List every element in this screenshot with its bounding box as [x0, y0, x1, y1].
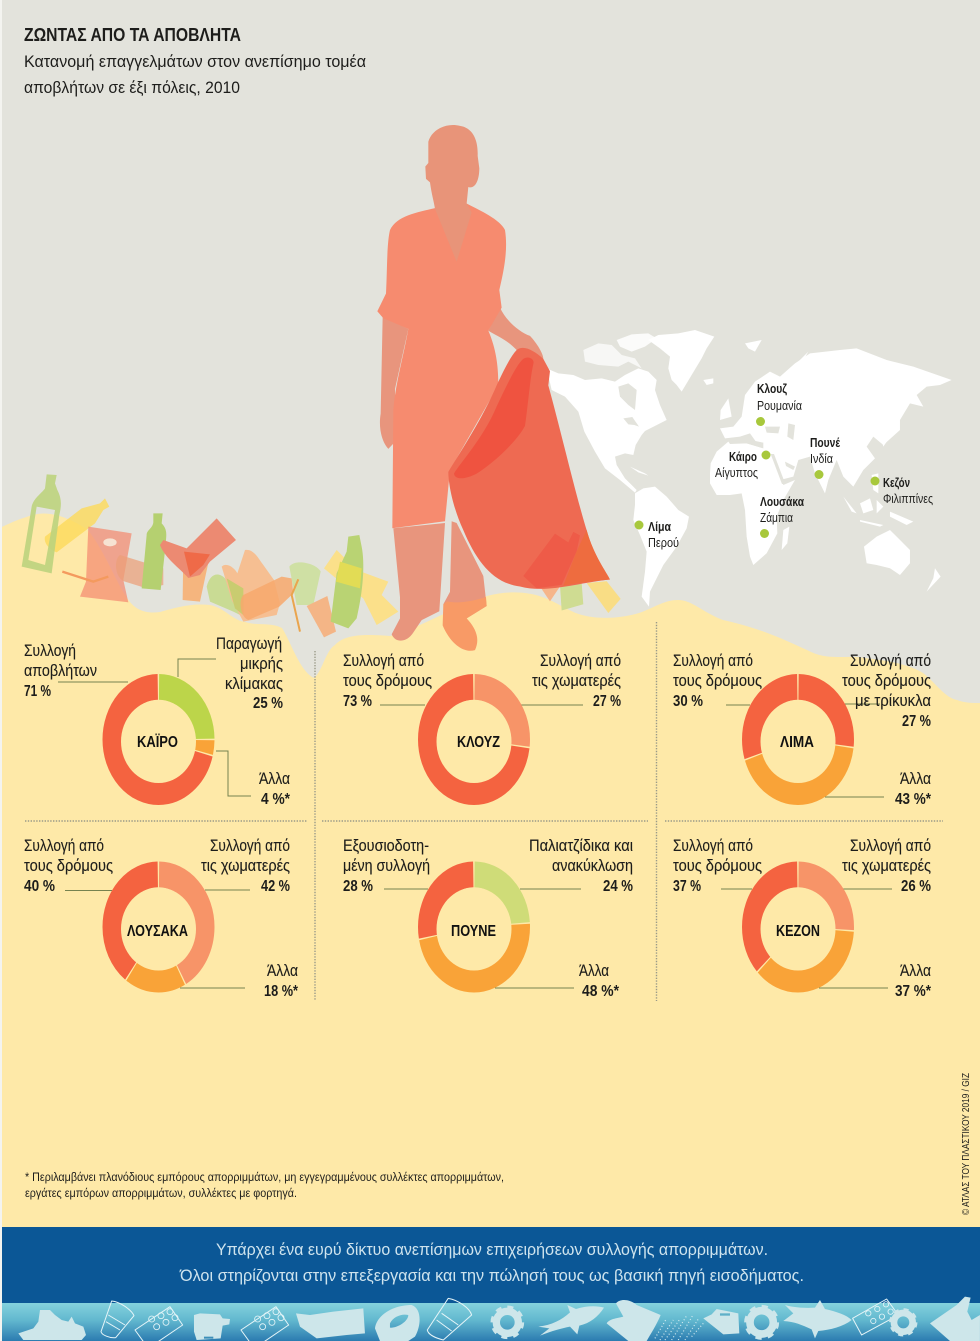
donut panel: Pune: μένη συλλογή [343, 857, 430, 875]
marker: Pune [810, 435, 840, 479]
sea strip waste icons: left [18, 1298, 472, 1341]
donut panel: Lima [673, 652, 932, 808]
donut panel: Pune: 24 % [603, 878, 633, 895]
donut panel: Lima: τους δρόμους [842, 672, 931, 690]
sea strip waste icons: right [493, 1297, 980, 1341]
right arm [488, 308, 543, 359]
footnote [25, 1170, 504, 1200]
icon: gear [493, 1308, 522, 1337]
donut panel: Quezon: ΚΕΖΟΝ [776, 923, 820, 940]
icon: gear 2 [746, 1307, 777, 1338]
icon: glove [324, 550, 398, 625]
marker: Kluj: Κλουζ [757, 381, 787, 396]
icon: green bottle 2 [142, 513, 166, 590]
left leg [392, 523, 445, 641]
icon: gear 3 [891, 1310, 916, 1335]
icon: fish 2 [783, 1300, 852, 1338]
donut panel: Quezon: τους δρόμους [673, 857, 762, 875]
icon: cup 2 [427, 1298, 472, 1340]
marker: Lima: Λίμα [648, 519, 671, 534]
icon: carrier bag [222, 550, 280, 622]
icon: plastic bag 2 [930, 1297, 980, 1341]
donut panel: Kluj: τους δρόμους [343, 672, 432, 690]
shirt [377, 204, 506, 528]
icon: cup [101, 1301, 134, 1338]
donut panel: Lusaka: 18 %* [264, 983, 299, 1000]
title block [24, 24, 366, 97]
icon: detergent bottle [703, 1309, 739, 1334]
banner: Υπάρχει ένα ευρύ δίκτυο ανεπίσημων επιχειρήσεων συλλογής απορριμμάτων. [216, 1240, 768, 1259]
sack [448, 348, 610, 589]
icon: bottle and glove overlap [336, 562, 362, 588]
donut panel: Lusaka [24, 837, 299, 1000]
donut panel: Quezon: Άλλα [900, 962, 931, 980]
icon: bottle [194, 1313, 230, 1340]
sack corner [563, 530, 610, 586]
donut panel: Quezon: τις χωματερές [842, 857, 931, 875]
donut panel: Kluj: Συλλογή από [540, 652, 621, 670]
donut panel: Quezon: 37 % [673, 878, 701, 895]
icon: microplastic spray [655, 1314, 703, 1340]
donut panel: Cairo: κλίμακας [225, 675, 283, 693]
icon: fish [538, 1305, 604, 1336]
map city markers and labels [634, 381, 933, 550]
icon: green bottle [22, 474, 61, 573]
sea strip [2, 1303, 980, 1341]
icon: green can [207, 575, 243, 617]
donut panel: Lima: 30 % [673, 693, 703, 710]
marker: Lusaka: Ζάμπια [760, 510, 793, 525]
donut panel: Lusaka: 42 % [261, 878, 290, 895]
icon: crumpled bottle [296, 1308, 365, 1338]
donut panel: Pune: Παλιατζίδικα και [529, 837, 633, 855]
donut panel: Lima: Άλλα [900, 770, 931, 788]
map: Americas and Greenland [547, 330, 714, 607]
donut panel: Lusaka: Άλλα [267, 962, 298, 980]
grid dividers [25, 622, 943, 1001]
donut panel: Lima: 27 % [902, 713, 931, 730]
marker: Lusaka [760, 494, 804, 538]
donut panel: Lima: τους δρόμους [673, 672, 762, 690]
sack inner fold [454, 357, 534, 478]
marker: Lima [634, 519, 679, 550]
donut panel: Kluj [343, 652, 621, 792]
donut panel: Kluj: 27 % [593, 693, 621, 710]
donut panel: Lusaka: Συλλογή από [210, 837, 290, 855]
donut panel: Pune: Εξουσιοδοτη- [343, 837, 429, 855]
plastic waste pile: right [207, 535, 398, 637]
marker: Cairo [715, 449, 770, 480]
donut chart: Quezon [753, 874, 843, 980]
icon: cup overlap [184, 552, 210, 577]
items behind sack [540, 581, 621, 613]
donut panel: Lusaka: Συλλογή από [24, 837, 104, 855]
icon: stirrer [292, 579, 300, 632]
icon: green cup [289, 562, 321, 605]
donut panel: Cairo [24, 635, 291, 808]
donut chart: Kluj [429, 687, 519, 792]
icon: plastic bag [80, 527, 132, 602]
donut panel: Kluj: ΚΛΟΥΖ [457, 734, 500, 751]
icon: plastic bag [607, 1300, 661, 1341]
donut panel: Cairo: Συλλογή [24, 642, 76, 660]
icon: can [116, 555, 163, 588]
title block: αποβλήτων σε έξι πόλεις, 2010 [24, 78, 240, 97]
icon: ship [18, 1310, 86, 1340]
marker: Lusaka: Λουσάκα [760, 494, 804, 509]
donut chart: Lusaka [114, 874, 204, 980]
donut panel: Cairo: 25 % [253, 695, 283, 712]
marker: Quezon [870, 475, 933, 506]
donut panel: Lima: 43 %* [895, 791, 932, 808]
marker: Kluj: Ρουμανία [757, 398, 802, 413]
icon: brick [135, 1307, 183, 1341]
marker: Quezon: Κεζόν [883, 475, 910, 490]
title block: Κατανομή επαγγελμάτων στον ανεπίσημο τομέα [24, 52, 366, 71]
donut panel: Lima: Συλλογή από [673, 652, 753, 670]
map: Europe, Asia, Africa, Australia [710, 340, 952, 592]
donut panel: Pune: 48 %* [582, 983, 620, 1000]
donut panel: Lusaka: ΛΟΥΣΑΚΑ [127, 923, 188, 940]
marker: Quezon: Φιλιππίνες [883, 491, 933, 506]
donut panel: Kluj: 73 % [343, 693, 372, 710]
icon: green overlap [227, 578, 243, 615]
marker: Cairo: Κάιρο [729, 449, 757, 464]
donut panel: Quezon [673, 837, 932, 1000]
donut panel: Lusaka: τις χωματερές [201, 857, 290, 875]
donut panel: Quezon: 26 % [901, 878, 931, 895]
donut panel: Pune: ανακύκλωση [552, 857, 633, 875]
icon: brick 3 [853, 1299, 898, 1335]
icon: plate stack [375, 1305, 420, 1341]
sand wave background [2, 513, 980, 1227]
bottle inside sack [523, 532, 580, 588]
person with sack [377, 125, 621, 651]
donut panel: Lusaka: 40 % [24, 878, 55, 895]
icon: orange cup [307, 596, 336, 637]
credit: © ΑΤΛΑΣ ΤΟΥ ΠΛΑΣΤΙΚΟΥ 2019 / GIZ [961, 1073, 972, 1215]
marker: Pune: Ινδία [810, 451, 833, 466]
donut panel: Cairo: Παραγωγή [216, 635, 282, 653]
donut panel: Quezon: Συλλογή από [850, 837, 931, 855]
donut panel: Cairo: Άλλα [259, 770, 290, 788]
head and neck [425, 125, 479, 262]
marker: Lima: Περού [648, 535, 679, 550]
marker: Cairo: Αίγυπτος [715, 465, 758, 480]
left forearm [380, 317, 408, 449]
world map [547, 330, 952, 607]
plastic waste pile: left [22, 474, 236, 602]
donut panel: Kluj: τις χωματερές [532, 672, 621, 690]
right foot [443, 597, 487, 651]
donut panel: Lima: Συλλογή από [850, 652, 931, 670]
donut panel: Quezon: 37 %* [895, 983, 932, 1000]
donut panel: Cairo: μικρής [240, 655, 283, 673]
donut panel: Cairo: αποβλήτων [24, 662, 97, 680]
donut panel: Pune: Άλλα [579, 962, 609, 980]
donut panel: Pune [343, 837, 633, 1000]
icon: brick 2 [241, 1307, 289, 1341]
donut panel: Lima: με τρίκυκλα [855, 692, 931, 710]
donut panel: Kluj: Συλλογή από [343, 652, 424, 670]
donut panel: Lima: ΛΙΜΑ [780, 734, 814, 751]
footnote: εργάτες εμπόρων απορριμμάτων, συλλέκτες με φορτηγά. [25, 1186, 297, 1200]
title block: ΖΩΝΤΑΣ ΑΠΟ ΤΑ ΑΠΟΒΛΗΤΑ [24, 24, 241, 45]
banner: Όλοι στηρίζονται στην επεξεργασία και την πώλησή τους ως βασική πηγή εισοδήματος. [179, 1266, 804, 1285]
banner [2, 1227, 980, 1303]
icon: green bottle 3 [331, 535, 363, 628]
icon: yellow bottle [45, 498, 109, 552]
donut panel: Cairo: 4 %* [261, 791, 291, 808]
icon: rolled tube [241, 577, 293, 620]
donut panel: Cairo: ΚΑΪΡΟ [137, 733, 178, 751]
donut chart: Pune [429, 874, 519, 980]
right leg [443, 521, 487, 618]
icon: straw [62, 572, 108, 582]
donut panel: Lusaka: τους δρόμους [24, 857, 113, 875]
donut panel: Cairo: 71 % [24, 683, 51, 700]
donut panel: Pune: ΠΟΥΝΕ [451, 923, 496, 940]
icon: cup [183, 552, 210, 602]
icon: bag handle [103, 538, 117, 546]
donut chart: Lima [753, 687, 843, 792]
donut chart: Cairo [114, 687, 204, 792]
donut panel: Quezon: Συλλογή από [673, 837, 753, 855]
donut panel: Pune: 28 % [343, 878, 373, 895]
marker: Pune: Πουνέ [810, 435, 840, 450]
footnote: * Περιλαμβάνει πλανόδιους εμπόρους απορριμμάτων, μη εγγεγραμμένους συλλέκτες απορριμμάτων, [25, 1170, 504, 1184]
icon: boot [160, 518, 236, 578]
marker: Kluj [756, 381, 802, 426]
